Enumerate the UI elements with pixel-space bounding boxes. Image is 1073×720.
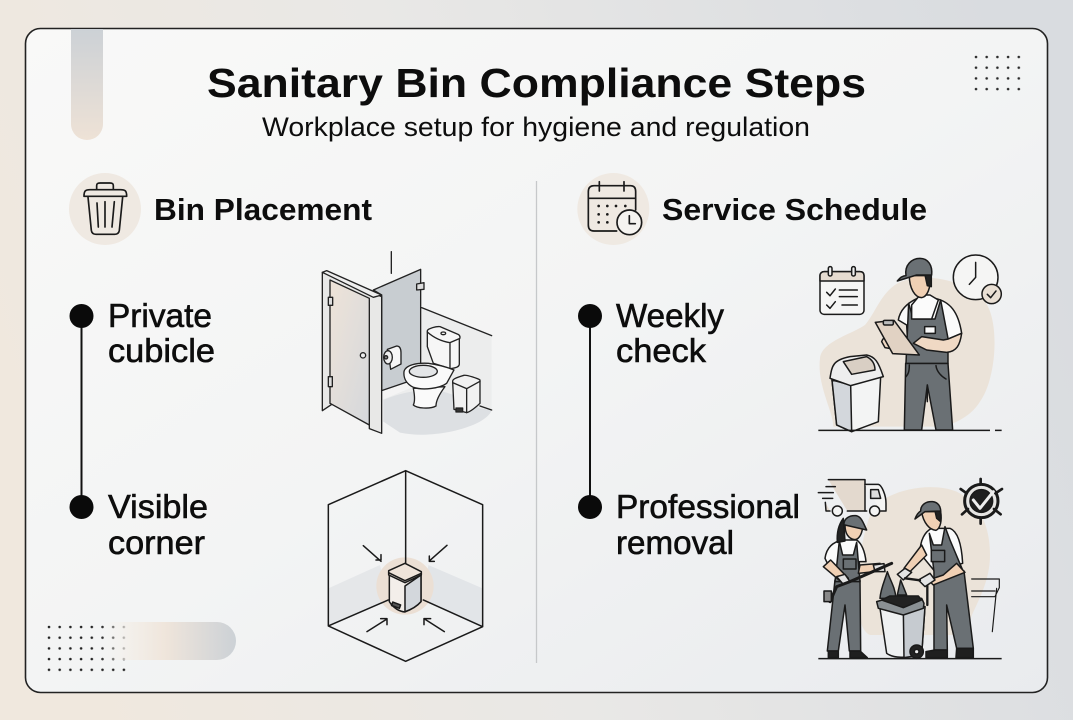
title: Sanitary Bin Compliance Steps (207, 60, 866, 106)
calendar (820, 272, 864, 314)
side cart (972, 579, 999, 632)
woman legs (827, 580, 861, 651)
label: visible corner: Visible (108, 488, 208, 525)
panel: bin placement (69, 173, 492, 661)
subtitle: Workplace setup for hygiene and regulation (262, 112, 810, 142)
centre divider (536, 181, 538, 663)
bin (880, 607, 925, 657)
label: visible corner: corner (108, 524, 205, 561)
illustration: toilet cubicle (322, 252, 492, 435)
illustration: bin in corner (328, 471, 483, 661)
label: weekly check: Weekly (616, 297, 724, 334)
head (909, 276, 931, 298)
man head (922, 512, 941, 530)
clock (953, 255, 998, 300)
clipboard (875, 320, 919, 355)
timeline: bin placement (70, 304, 94, 519)
label: professional removal (616, 488, 800, 561)
label: weekly check (616, 297, 724, 369)
shirt (898, 298, 962, 355)
arm (913, 333, 962, 352)
label: private cubicle (108, 297, 215, 369)
trash bin (832, 377, 881, 432)
bag (880, 572, 896, 598)
decorative dots top-right (974, 55, 1022, 93)
decorative top-left pill (71, 29, 103, 140)
bib (906, 300, 948, 363)
badge (965, 484, 998, 518)
label: weekly check: check (616, 332, 707, 369)
worker legs (904, 363, 953, 430)
heading: bin placement: Bin Placement (154, 192, 372, 227)
decorative dots bottom-left (47, 625, 127, 673)
man legs (934, 571, 973, 650)
ground line (818, 656, 1002, 661)
label: professional removal: Professional (616, 488, 800, 525)
timeline: service schedule (578, 304, 602, 519)
illustration: weekly check worker (818, 255, 1002, 432)
cap (897, 258, 932, 281)
illustration: professional removal workers (818, 479, 1002, 659)
icon: calendar clock (577, 173, 649, 245)
label: private cubicle: Private (108, 297, 212, 334)
truck (825, 480, 865, 511)
label: professional removal: removal (616, 524, 734, 561)
icon: trash bin (69, 173, 141, 245)
panel: service schedule (577, 173, 1002, 659)
label: visible corner (108, 488, 208, 561)
label: private cubicle: cubicle (108, 332, 215, 369)
woman head (837, 518, 845, 542)
ground line (818, 428, 1002, 433)
decorative bottom-left pill (100, 622, 236, 660)
heading: service schedule: Service Schedule (662, 192, 927, 227)
